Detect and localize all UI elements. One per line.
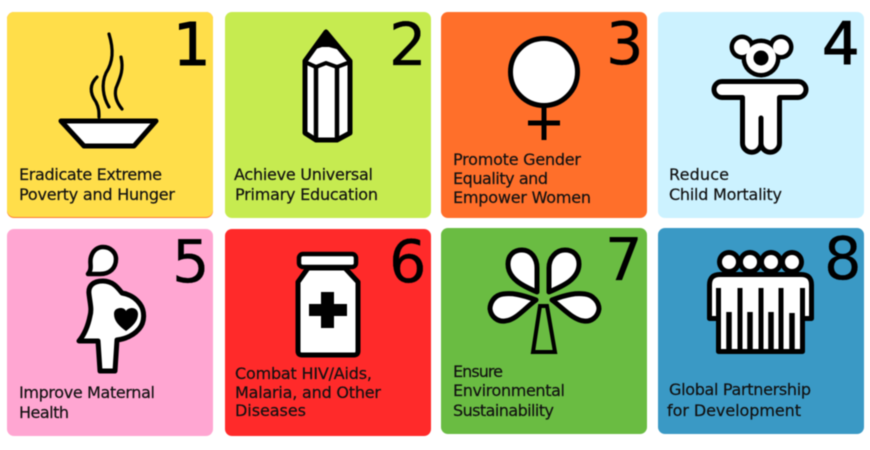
label: goal 2: Primary Education [235, 185, 378, 204]
label: goal 5 [19, 383, 155, 422]
label: goal 7: Environmental [453, 381, 565, 400]
label: goal 1 [19, 165, 175, 204]
label: goal 2 [234, 165, 378, 204]
label: goal 7: Ensure [453, 362, 503, 381]
icon: medicine jar [298, 254, 358, 355]
label: goal 4: Reduce [669, 165, 729, 184]
number 5: 5 [172, 227, 210, 296]
number 6: 6 [389, 227, 427, 296]
number 3: 3 [606, 9, 644, 78]
icon: pregnant woman [79, 247, 144, 371]
icon: four-leaf tree [490, 250, 599, 352]
panel: goal 5 [7, 227, 213, 436]
label: goal 6: Malaria, and Other [235, 383, 381, 402]
panel: goal 7 [441, 225, 647, 434]
label: goal 2: Achieve Universal [234, 165, 373, 184]
icon: steaming bowl [61, 34, 156, 146]
label: goal 6: Diseases [235, 401, 306, 420]
panel: goal 2 [225, 10, 431, 218]
icon: pencil [305, 29, 350, 140]
panel: goal 8 [658, 224, 864, 434]
number 2: 2 [389, 10, 427, 79]
label: goal 3 [453, 150, 591, 207]
panel: goal 1 [7, 10, 213, 218]
label: goal 3: Equality and [453, 169, 548, 188]
number 8: 8 [824, 224, 862, 293]
panel: goal 6 [225, 227, 431, 436]
label: goal 5: Improve Maternal [19, 383, 155, 402]
label: goal 4 [669, 165, 782, 204]
label: goal 3: Promote Gender [453, 150, 581, 169]
label: goal 5: Health [19, 403, 69, 422]
number 1: 1 [173, 10, 211, 79]
number 7: 7 [605, 225, 643, 294]
icon: female symbol [510, 38, 578, 140]
label: goal 8 [667, 380, 811, 420]
label: goal 1: Poverty and Hunger [19, 185, 175, 204]
label: goal 6: Combat HIV/Aids, [235, 364, 372, 383]
label: goal 8: Global Partnership [669, 380, 811, 399]
label: goal 1: Eradicate Extreme [19, 165, 162, 184]
panel: goal 3 [441, 9, 647, 218]
number 4: 4 [822, 9, 860, 78]
icon: child with teddy head [714, 34, 806, 152]
label: goal 6 [235, 364, 381, 420]
label: goal 7: Sustainability [453, 401, 554, 420]
label: goal 7 [453, 362, 565, 420]
panel: goal 4 [658, 9, 864, 218]
label: goal 8: for Development [667, 401, 801, 420]
icon: group of people [710, 250, 812, 352]
label: goal 4: Child Mortality [669, 185, 782, 204]
label: goal 3: Empower Women [453, 188, 591, 207]
